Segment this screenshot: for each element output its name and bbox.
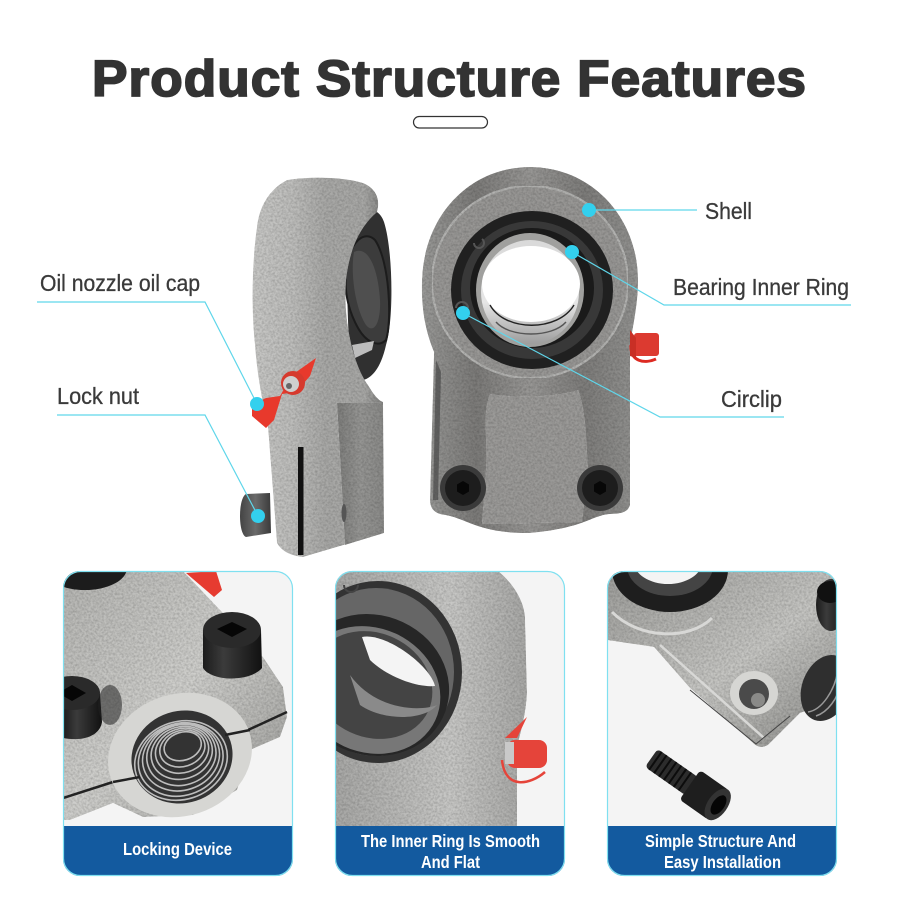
callout: bearing inner ring <box>565 245 851 305</box>
panel 2: caption line 2: And Flat <box>421 852 480 872</box>
product: side view <box>240 178 391 557</box>
callout: lock nut: Lock nut <box>57 383 140 409</box>
panel 2: caption line 1: The Inner Ring Is Smooth <box>361 831 540 851</box>
front view: left bolt <box>440 465 486 511</box>
side view: bolt hole <box>342 504 346 522</box>
front view: flange <box>432 186 628 378</box>
side view: clamp slit <box>298 447 304 555</box>
callout: oil nozzle oil cap: Oil nozzle oil cap <box>40 270 200 296</box>
front view: bore ribs <box>490 305 574 334</box>
front view: gray seal ring <box>461 221 603 359</box>
panel 1: caption bar <box>63 826 293 876</box>
panel 3: border <box>608 572 836 876</box>
panel 1: photo <box>63 571 292 826</box>
callout: shell: Shell <box>705 198 752 224</box>
front view: bearing bore <box>481 240 579 344</box>
callout: lock nut <box>57 383 265 523</box>
panel 3: loose screw <box>646 750 731 820</box>
front view: right bolt <box>577 465 623 511</box>
front view: bore opening <box>482 246 580 322</box>
product: front view <box>422 167 659 533</box>
side view: oil cap <box>252 358 316 428</box>
front view: dark inner ring <box>470 228 594 348</box>
callout: oil nozzle oil cap <box>37 270 264 411</box>
panel 3: caption line 2: Easy Installation <box>664 852 781 872</box>
side view: lock nut stud <box>240 493 271 537</box>
title pill ornament <box>414 116 488 128</box>
front view: neck <box>482 390 588 524</box>
front view: circlip ends <box>456 239 484 308</box>
front view: black seal ring <box>451 211 613 369</box>
panel 3: photo <box>607 571 837 826</box>
callout: circlip <box>456 306 784 417</box>
panel 3: caption line 1: Simple Structure And <box>645 831 796 851</box>
panel 1: caption: Locking Device <box>123 839 232 859</box>
front view: shell <box>422 167 638 533</box>
panel: simple structure <box>606 570 838 876</box>
front view: red oil cap <box>630 330 659 361</box>
front view: inner ring <box>476 233 584 347</box>
panel 1: border <box>64 572 292 876</box>
callout: shell <box>582 198 752 224</box>
callout: bearing inner ring: Bearing Inner Ring <box>673 274 849 300</box>
panel 2: photo <box>335 571 564 826</box>
panel 3: caption bar <box>607 826 837 876</box>
callout: circlip: Circlip <box>721 386 782 412</box>
title: Product Structure Features <box>92 50 807 107</box>
front view: left web shadow <box>433 360 441 500</box>
side view: shell <box>253 178 384 557</box>
side view: flat face <box>337 402 384 545</box>
panel 2: border <box>336 572 564 876</box>
panel: inner ring <box>334 570 566 876</box>
side view: inner bearing <box>345 210 391 381</box>
panel 2: caption bar <box>335 826 565 876</box>
panel: locking device <box>62 570 294 876</box>
